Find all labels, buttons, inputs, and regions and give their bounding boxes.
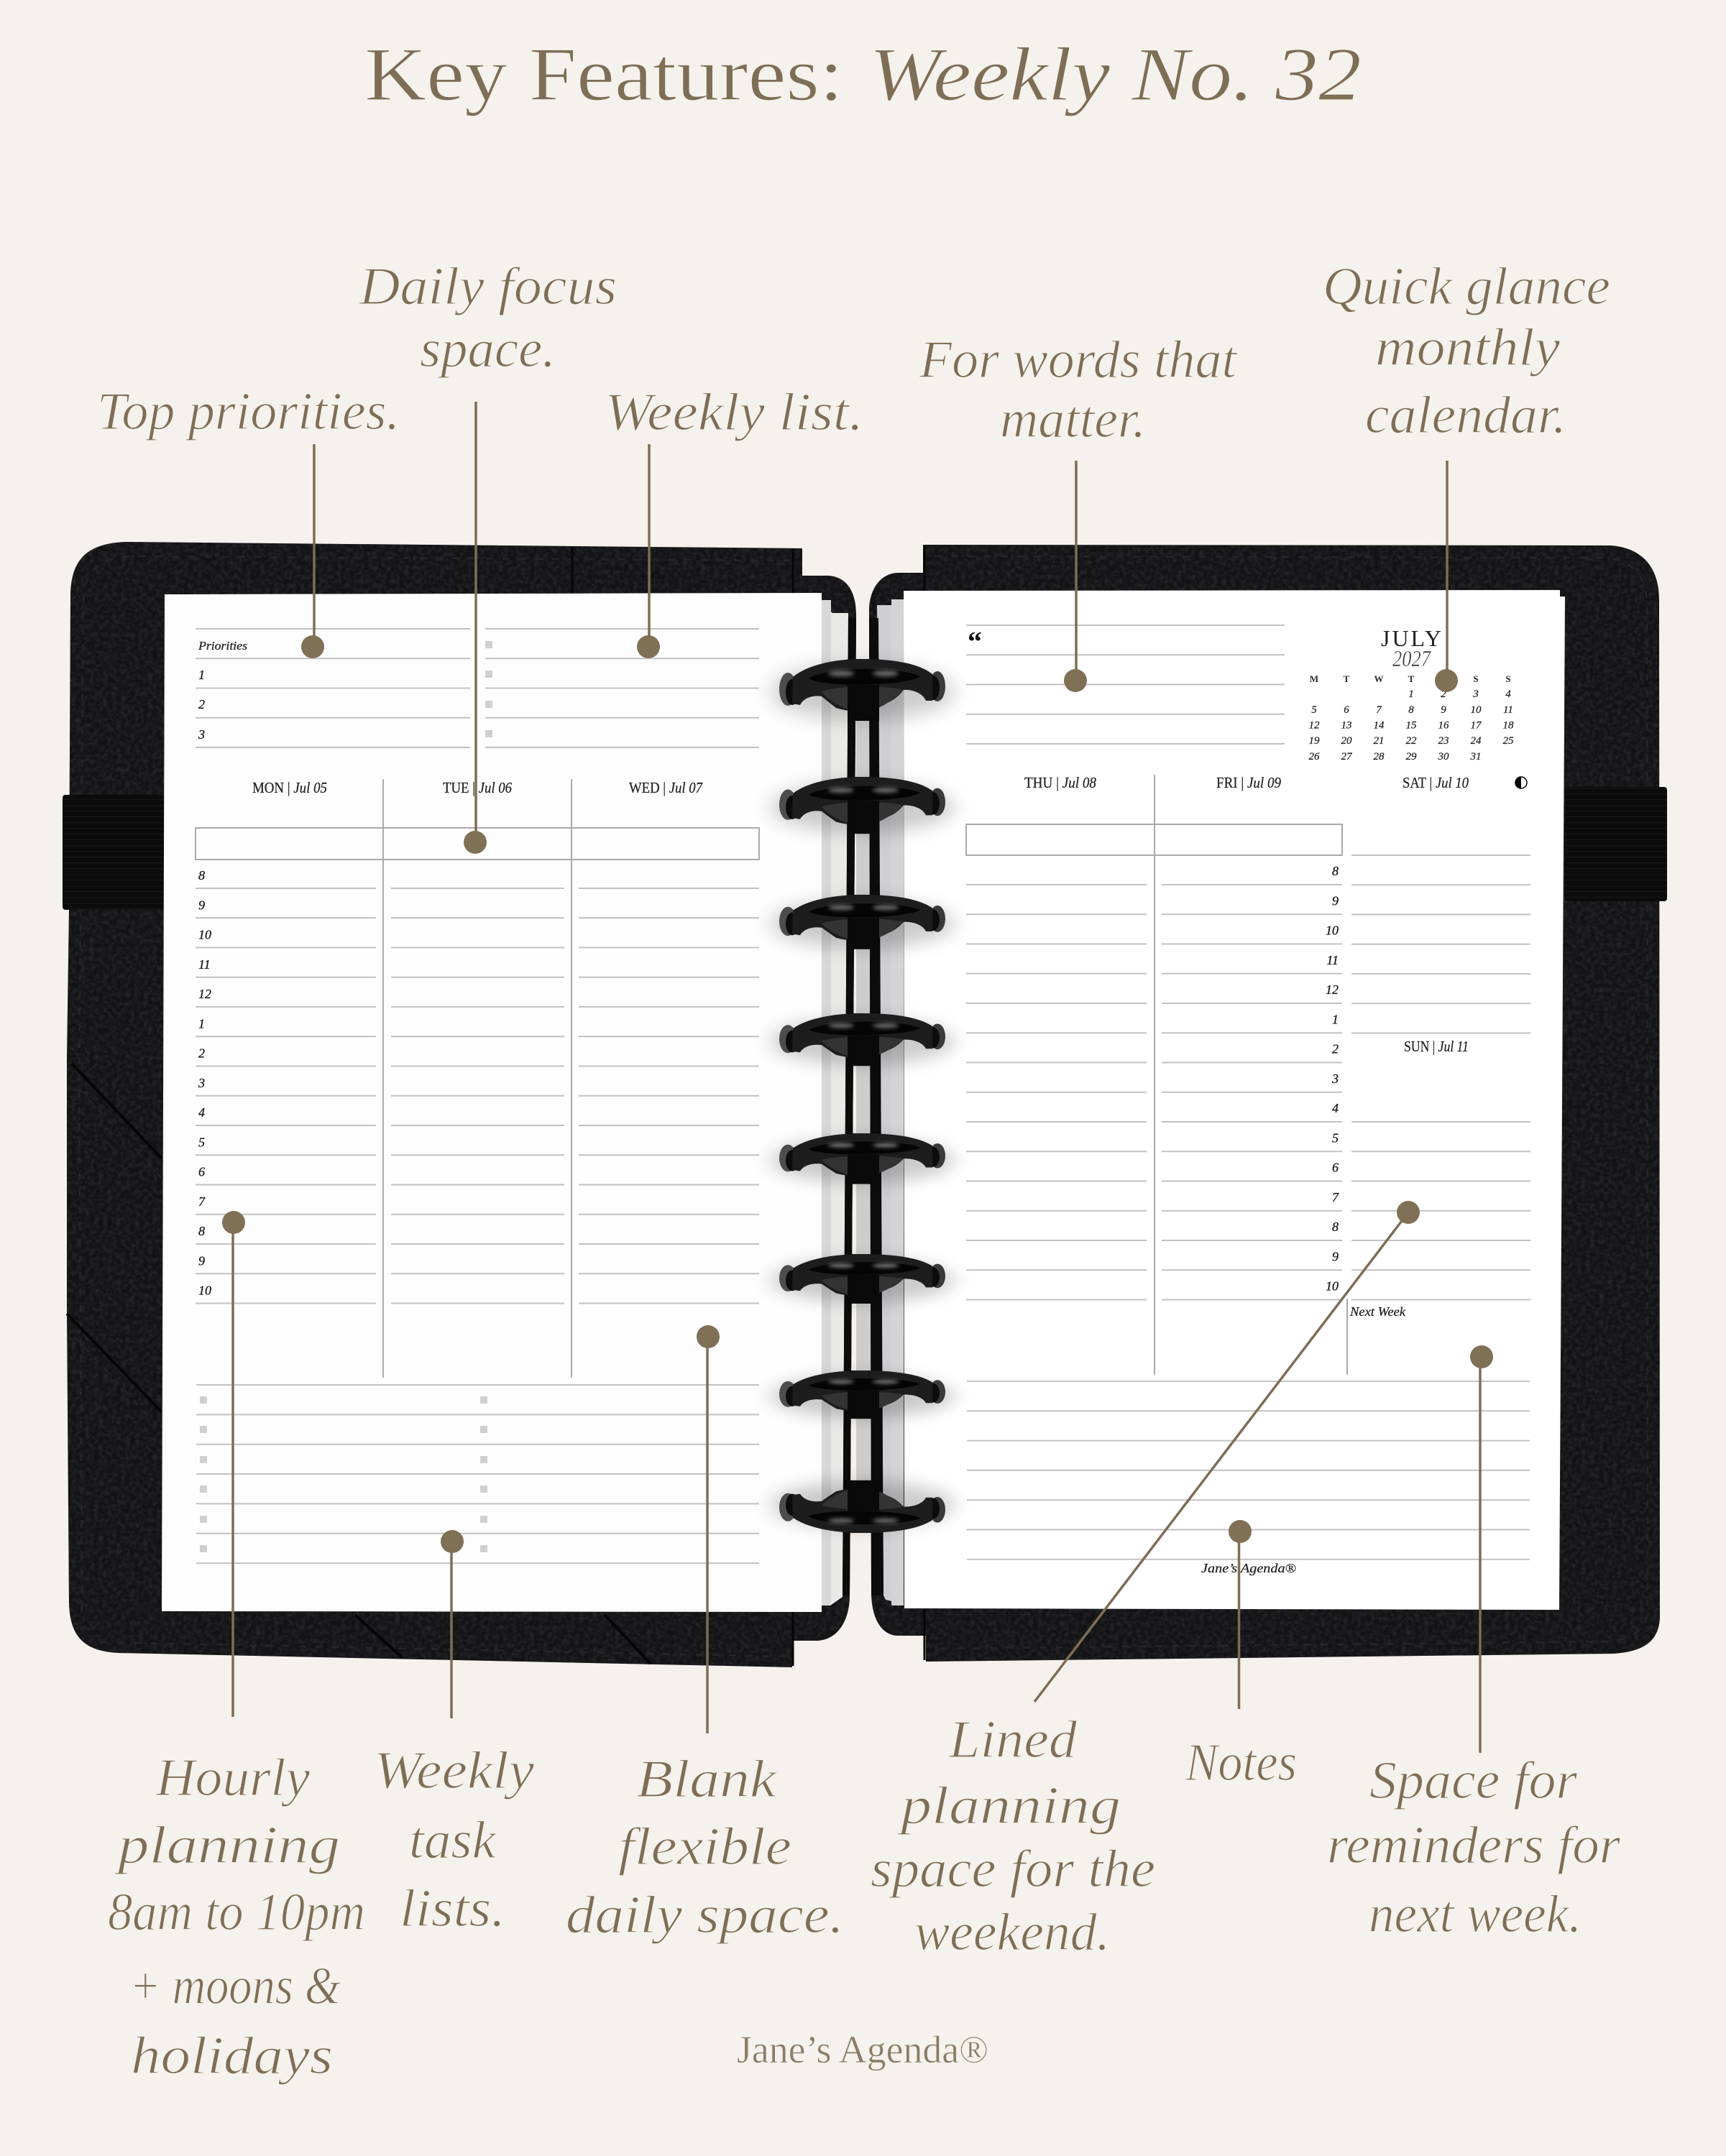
mini calendar: July 2027: JULY [1381, 625, 1441, 651]
hour labels: 12 [1326, 982, 1339, 997]
callout: Notes: Notes [1185, 1733, 1297, 1792]
ring 6 [771, 1254, 955, 1304]
weekly task checkboxes [200, 1396, 487, 1552]
callout: Daily focus space [359, 257, 617, 854]
callout: Top priorities [97, 382, 400, 658]
callout: Daily focus space: space. [420, 320, 556, 379]
hour labels: 4 [198, 1105, 205, 1120]
callout: For words that matter: matter. [1000, 390, 1146, 449]
mini calendar: July 2027 [1308, 625, 1514, 763]
title: Key Features: [364, 32, 843, 116]
priorities text: 2 [198, 697, 205, 711]
priorities text: 1 [198, 668, 205, 682]
mini calendar: July 2027: W [1374, 673, 1383, 684]
mini calendar: July 2027: 9 [1441, 704, 1446, 716]
callout: Weekly task lists: Weekly [374, 1741, 534, 1800]
mini calendar: July 2027: 2 [1441, 688, 1446, 700]
hour labels: 8 [1332, 864, 1339, 878]
mini calendar: July 2027: 17 [1471, 720, 1482, 732]
mini calendar: July 2027: 28 [1373, 751, 1385, 763]
mini calendar: July 2027: 24 [1471, 735, 1482, 747]
day heading: Wednesday: WED | Jul 07 [629, 779, 703, 796]
ring 8 (bottom, flipped) [771, 1480, 955, 1533]
mini calendar: July 2027: 7 [1376, 704, 1382, 716]
mini calendar: July 2027: 18 [1502, 720, 1514, 732]
hour labels: 12 [198, 987, 211, 1001]
callout: Weekly task lists: task [409, 1811, 497, 1870]
mini calendar: July 2027: 6 [1344, 704, 1349, 716]
mini calendar: July 2027: 1 [1408, 688, 1414, 700]
hour labels: 9 [1332, 893, 1339, 908]
day columns dividers [1155, 775, 1347, 1375]
callout: Hourly planning: 8am to 10pm [108, 1883, 365, 1942]
callout: For words that matter: For words that [919, 331, 1238, 390]
day heading: Saturday: SAT | Jul 10 [1403, 774, 1469, 791]
day heading: Friday: FRI | Jul 09 [1216, 774, 1281, 791]
priorities text: 3 [198, 727, 205, 742]
callout: Quick glance monthly calendar [1323, 257, 1610, 692]
day heading: Sunday: SUN | Jul 11 [1404, 1038, 1469, 1055]
priorities text: Priorities [198, 639, 247, 653]
callout: Hourly planning: + moons & [129, 1957, 341, 2016]
mini calendar: July 2027: 15 [1406, 720, 1417, 732]
hour labels: 2 [198, 1046, 205, 1061]
callout: Weekly task lists: lists. [400, 1879, 505, 1938]
callout: Blank flexible daily space: Blank [636, 1750, 777, 1809]
hour labels: 10 [198, 927, 211, 941]
title: Weekly No. 32 [869, 32, 1362, 116]
callout: Lined planning space for the weekend: weekend. [914, 1903, 1110, 1962]
ring 7 [771, 1370, 955, 1419]
hour labels: 11 [1326, 953, 1339, 967]
hour labels: 11 [198, 957, 211, 972]
ring 3 [771, 895, 955, 949]
day heading: Thursday: THU | Jul 08 [1024, 774, 1096, 791]
left paper stack [822, 600, 848, 1606]
mini calendar: July 2027: 13 [1341, 720, 1351, 732]
hourly rules [1057, 854, 1441, 1301]
mini calendar: July 2027: 16 [1438, 720, 1449, 732]
mini calendar: July 2027: 26 [1308, 751, 1320, 763]
mini calendar: July 2027: 21 [1373, 735, 1385, 747]
daily focus box [196, 828, 759, 860]
mini calendar: July 2027: 4 [1505, 688, 1511, 700]
mini calendar: July 2027: T [1408, 673, 1415, 684]
page brand mark: Jane’s Agenda® [1201, 1561, 1296, 1575]
hour labels: 10 [1326, 1279, 1339, 1294]
callout: Lined planning space for the weekend: planning [896, 1777, 1121, 1835]
hour labels: 3 [1331, 1072, 1339, 1086]
weekly list checkboxes [485, 641, 492, 737]
right elastic strap [1565, 787, 1667, 901]
mini calendar: July 2027: 22 [1406, 735, 1417, 747]
day heading: Tuesday: TUE | Jul 06 [443, 779, 512, 796]
callout: Space for reminders for next week: Space for [1369, 1751, 1578, 1810]
mini calendar: July 2027: S [1505, 673, 1511, 684]
mini calendar: July 2027: 14 [1373, 720, 1385, 732]
weekly task rules [196, 1384, 759, 1565]
hour labels [198, 868, 211, 1298]
hour labels: 1 [1332, 1012, 1339, 1026]
hour labels: 6 [1332, 1160, 1339, 1174]
mini calendar: July 2027: 20 [1341, 735, 1352, 747]
callout: Weekly task lists [374, 1530, 534, 1938]
hour labels: 10 [198, 1284, 211, 1298]
mini calendar: July 2027: 5 [1311, 704, 1317, 716]
mini calendar: July 2027: 31 [1469, 751, 1481, 763]
mini calendar: July 2027: 10 [1471, 704, 1482, 716]
mini calendar: July 2027: 8 [1408, 704, 1414, 716]
hour labels: 1 [198, 1016, 205, 1031]
hour labels: 8 [198, 1224, 205, 1238]
callout: Lined planning space for the weekend: space for the [871, 1840, 1155, 1899]
callout: Notes [1185, 1520, 1297, 1792]
hour labels: 9 [1332, 1249, 1339, 1263]
day heading: Monday: MON | Jul 05 [252, 779, 327, 796]
callout: Blank flexible daily space: daily space. [566, 1886, 844, 1945]
callout: Top priorities: Top priorities. [97, 382, 400, 441]
ring 2 [771, 777, 955, 834]
hour labels: 3 [198, 1076, 205, 1090]
callout: Weekly list: Weekly list. [605, 383, 863, 442]
mini calendar: July 2027: 30 [1438, 751, 1449, 763]
hour labels [1326, 864, 1339, 1294]
ring 1 [771, 659, 955, 721]
hour labels: 10 [1326, 923, 1339, 937]
day columns dividers [383, 779, 571, 1378]
left cover [67, 542, 856, 1667]
icon: half moon [1515, 777, 1527, 788]
left elastic strap [63, 795, 165, 910]
notes rules [967, 1381, 1530, 1561]
hour labels: 7 [1332, 1190, 1339, 1204]
callout: Lined planning space for the weekend: Lined [948, 1710, 1078, 1769]
hour labels: 8 [198, 868, 205, 883]
callout: Blank flexible daily space [566, 1325, 844, 1945]
hour labels: 8 [1332, 1220, 1339, 1234]
callout: Space for reminders for next week: reminders for [1327, 1816, 1621, 1875]
weekly list rules [485, 628, 759, 749]
callout: For words that matter [919, 331, 1238, 692]
mini calendar: July 2027: 12 [1308, 720, 1320, 732]
callout: Space for reminders for next week [1327, 1345, 1621, 1944]
left page [162, 593, 822, 1612]
mini calendar: July 2027: 27 [1341, 751, 1353, 763]
hour labels: 9 [198, 898, 205, 912]
mini calendar: July 2027: 29 [1406, 751, 1417, 763]
ring 4 [771, 1013, 955, 1066]
spine gap shading [856, 690, 871, 1495]
hourly rules [286, 888, 669, 1304]
mini calendar: July 2027: S [1473, 673, 1479, 684]
mini calendar: July 2027: 25 [1502, 735, 1514, 747]
binding rods [843, 618, 883, 1595]
callout: Hourly planning: Hourly [155, 1749, 310, 1807]
hour labels: 4 [1332, 1101, 1339, 1115]
hour labels: 6 [198, 1164, 205, 1179]
hour labels: 9 [198, 1253, 205, 1268]
mini calendar: July 2027: 19 [1308, 735, 1320, 747]
quote mark: “ [968, 625, 982, 658]
callout: Quick glance monthly calendar: calendar. [1365, 386, 1566, 445]
callout: Hourly planning: planning [114, 1816, 340, 1875]
mini calendar: July 2027: 23 [1438, 735, 1449, 747]
ring 5 [771, 1133, 955, 1184]
callout: Hourly planning [108, 1211, 365, 2086]
planner: open agenda [63, 542, 1667, 1667]
next week label: Next Week [1349, 1304, 1406, 1319]
daily focus box [966, 824, 1342, 855]
callout: Weekly list [605, 383, 863, 658]
callout: Quick glance monthly calendar: monthly [1375, 318, 1560, 377]
mini calendar: July 2027: F [1441, 673, 1446, 684]
title [364, 32, 1362, 116]
callout: Quick glance monthly calendar: Quick glance [1323, 257, 1610, 316]
callout: Space for reminders for next week: next week. [1369, 1885, 1582, 1944]
mini calendar: July 2027: M [1310, 673, 1318, 684]
hour labels: 5 [1332, 1130, 1339, 1145]
right page [904, 590, 1565, 1610]
callout: Lined planning space for the weekend [871, 1201, 1420, 1962]
mini calendar: July 2027: 11 [1503, 704, 1513, 716]
priorities rules [196, 628, 470, 749]
callout: Daily focus space: Daily focus [359, 257, 617, 316]
callout: Blank flexible daily space: flexible [618, 1818, 791, 1876]
hour labels: 7 [198, 1194, 206, 1209]
hour labels: 2 [1332, 1042, 1339, 1056]
quote rules [966, 625, 1285, 745]
right cover [869, 545, 1660, 1662]
mini calendar: July 2027: T [1344, 673, 1350, 684]
mini calendar: July 2027: 3 [1472, 688, 1479, 700]
mini calendar: July 2027: 2027 [1392, 645, 1432, 671]
hour labels: 5 [198, 1135, 205, 1149]
footer brand: Jane’s Agenda® [737, 2028, 988, 2071]
right paper stack [877, 599, 904, 1606]
callout: Hourly planning: holidays [131, 2027, 333, 2086]
priorities text [198, 639, 247, 742]
